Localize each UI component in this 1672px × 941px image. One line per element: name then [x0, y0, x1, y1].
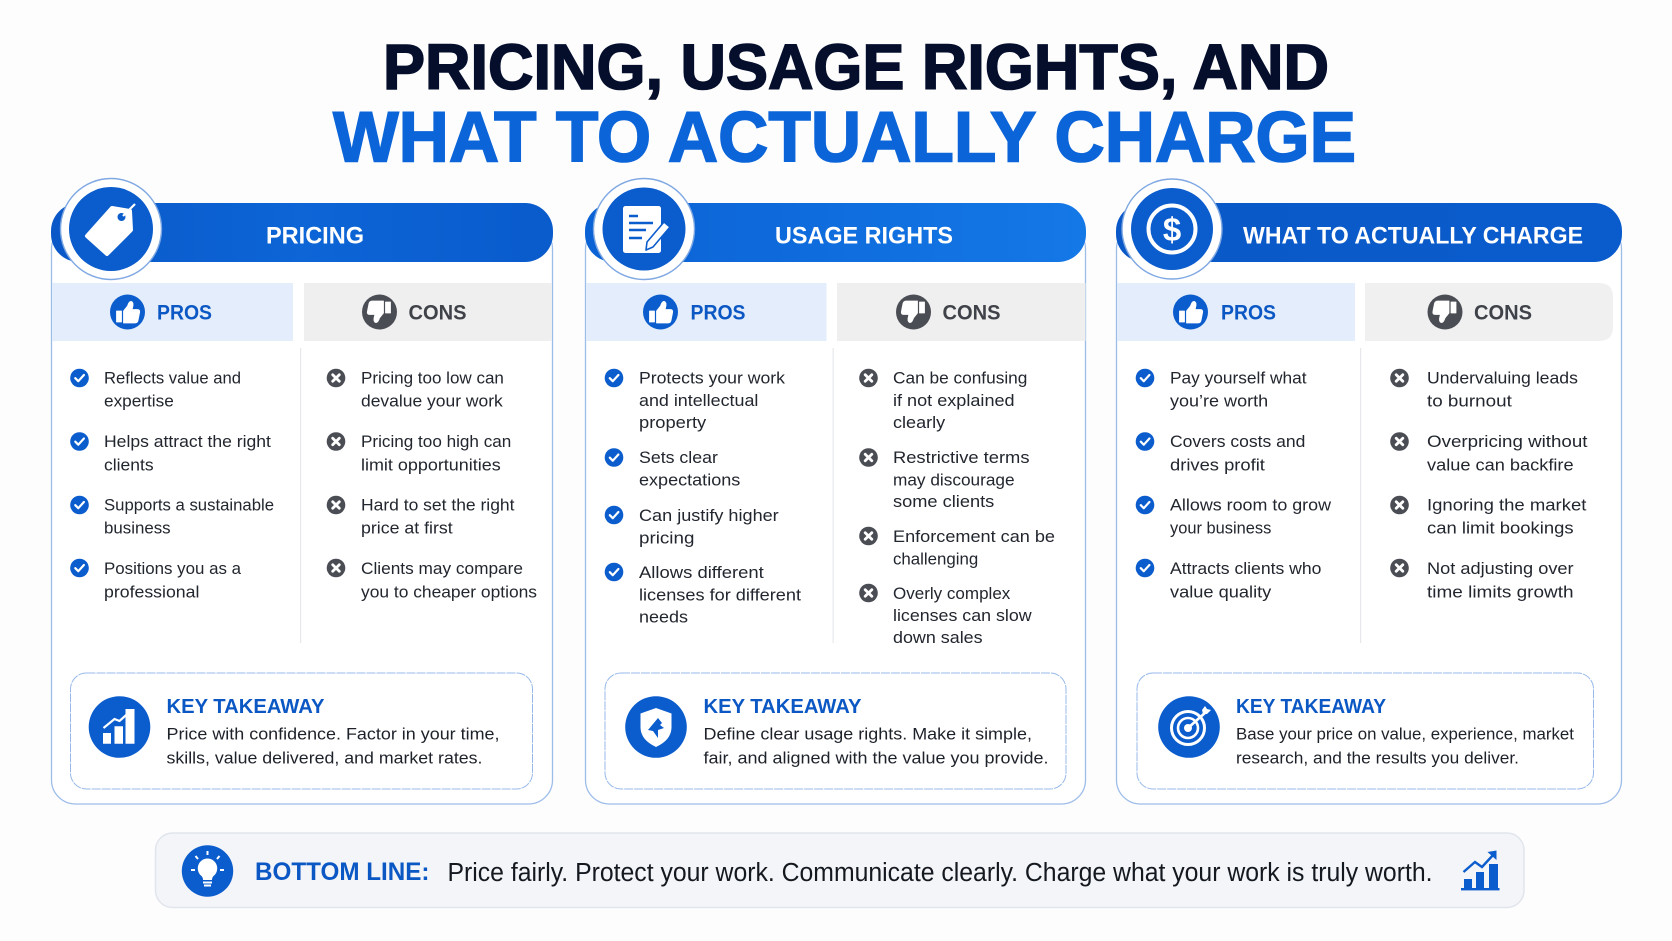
title	[333, 31, 1356, 178]
icon: rising chart	[1461, 850, 1500, 890]
pro item: drives profit	[1170, 456, 1265, 474]
pro item: Pay yourself what	[1170, 368, 1307, 388]
con item: challenging	[893, 550, 978, 568]
pro item	[70, 368, 241, 410]
pro item	[1136, 368, 1307, 410]
pro item: pricing	[639, 528, 694, 548]
title: WHAT TO ACTUALLY CHARGE	[333, 98, 1356, 178]
con item: Restrictive terms	[893, 448, 1030, 467]
pro item: you’re worth	[1170, 392, 1268, 410]
cons header: CONS	[408, 302, 466, 324]
pro item: Reflects value and	[104, 368, 241, 388]
pro item	[70, 496, 274, 538]
pros header: PROS	[690, 302, 746, 324]
pro item: clients	[104, 456, 154, 474]
icon: growth chart	[89, 696, 150, 758]
key takeaway	[605, 673, 1066, 789]
con item	[1390, 432, 1588, 474]
con item: you to cheaper options	[361, 582, 537, 602]
con item: some clients	[893, 492, 994, 511]
pro item: licenses for different	[639, 586, 801, 604]
con item	[327, 559, 537, 602]
header title: WHAT TO ACTUALLY CHARGE	[1243, 222, 1583, 250]
con item: limit opportunities	[361, 456, 501, 474]
con item: price at first	[361, 518, 453, 538]
pro item: expertise	[104, 392, 174, 410]
con item	[859, 448, 1030, 511]
con item: Not adjusting over	[1427, 559, 1574, 578]
con item	[859, 527, 1055, 568]
panel outline	[1116, 225, 1622, 804]
con item	[859, 368, 1027, 432]
icon: dollar coin: $	[1163, 211, 1181, 248]
con item: Overly complex	[893, 584, 1011, 603]
pros list	[1136, 368, 1332, 602]
pro item	[605, 506, 779, 548]
con item: if not explained	[893, 391, 1015, 410]
pro item: property	[639, 413, 707, 432]
pros header	[52, 283, 293, 341]
cons list	[1390, 368, 1588, 602]
cons header	[1365, 283, 1613, 341]
panel: what to actually charge	[1116, 179, 1622, 804]
con item: Can be confusing	[893, 368, 1027, 388]
con item: time limits growth	[1427, 582, 1574, 602]
header bar	[1116, 203, 1622, 262]
cons header: CONS	[1474, 302, 1532, 324]
bottom line banner: BOTTOM LINE:	[255, 858, 430, 886]
pro item: Covers costs and	[1170, 432, 1305, 451]
con item	[327, 368, 504, 410]
pro item	[70, 432, 271, 474]
pros header: PROS	[157, 302, 212, 324]
cons list	[859, 368, 1055, 647]
pro item: Positions you as a	[104, 559, 242, 578]
icon: document and pen	[594, 178, 694, 280]
pros header	[1117, 283, 1355, 341]
bottom line banner	[156, 833, 1524, 908]
con item: to burnout	[1427, 392, 1512, 410]
icon: price tag	[60, 178, 162, 280]
pro item: Helps attract the right	[104, 432, 271, 451]
pro item	[1136, 559, 1321, 602]
pro item: needs	[639, 608, 688, 626]
key takeaway: Base your price on value, experience, market	[1236, 724, 1574, 744]
cons header: CONS	[942, 302, 1000, 324]
con item: Enforcement can be	[893, 527, 1055, 546]
con item	[327, 432, 511, 474]
pro item	[605, 448, 740, 490]
key takeaway	[1137, 673, 1594, 789]
key takeaway: fair, and aligned with the value you provide.	[704, 748, 1048, 768]
pro item: Supports a sustainable	[104, 496, 274, 514]
icon: shield	[625, 696, 687, 758]
key takeaway	[70, 673, 532, 789]
pro item	[70, 559, 242, 602]
con item: down sales	[893, 628, 983, 647]
pro item: professional	[104, 582, 199, 602]
con item: may discourage	[893, 470, 1015, 490]
con item: Pricing too low can	[361, 368, 504, 388]
con item: value can backfire	[1427, 456, 1574, 474]
con item: Undervaluing leads	[1427, 368, 1578, 388]
key takeaway: KEY TAKEAWAY	[1236, 695, 1386, 718]
key takeaway: research, and the results you deliver.	[1236, 748, 1519, 768]
key takeaway: KEY TAKEAWAY	[704, 695, 862, 718]
pro item: Allows room to grow	[1170, 496, 1332, 514]
pro item: business	[104, 518, 171, 538]
header bar	[51, 203, 553, 262]
con item: devalue your work	[361, 392, 503, 410]
con item	[1390, 368, 1578, 410]
pros list	[70, 368, 274, 602]
pro item	[1136, 496, 1332, 538]
con item	[327, 496, 515, 538]
panel outline	[52, 225, 552, 804]
panel: usage rights	[585, 178, 1086, 804]
con item: Overpricing without	[1427, 432, 1588, 451]
header title: PRICING	[266, 222, 364, 250]
con item: Pricing too high can	[361, 432, 511, 451]
key takeaway: Price with confidence. Factor in your time,	[166, 724, 500, 744]
con item: clearly	[893, 413, 946, 432]
panel outline	[586, 225, 1086, 804]
icon: dollar coin	[1122, 179, 1222, 279]
key takeaway: Define clear usage rights. Make it simple,	[704, 724, 1032, 744]
header title: USAGE RIGHTS	[775, 222, 953, 250]
con item: can limit bookings	[1427, 518, 1574, 538]
pro item: Attracts clients who	[1170, 559, 1321, 578]
pro item: and intellectual	[639, 391, 758, 410]
con item: Clients may compare	[361, 559, 523, 578]
cons header	[837, 283, 1086, 341]
pros list	[605, 368, 801, 626]
pro item: Allows different	[639, 563, 764, 582]
header bar	[585, 203, 1086, 262]
pro item: expectations	[639, 470, 740, 490]
key takeaway: KEY TAKEAWAY	[166, 695, 325, 718]
pro item	[605, 368, 786, 432]
pro item: value quality	[1170, 582, 1272, 602]
con item: Hard to set the right	[361, 496, 515, 514]
cons list	[327, 368, 537, 602]
icon: light bulb	[182, 845, 233, 897]
pro item: Protects your work	[639, 368, 786, 388]
bottom line banner: Price fairly. Protect your work. Communicate clearly. Charge what your work is truly worth.	[448, 859, 1432, 887]
con item	[1390, 496, 1587, 538]
pros header: PROS	[1221, 302, 1276, 324]
icon: target	[1158, 696, 1220, 758]
con item	[859, 584, 1033, 647]
con item: Ignoring the market	[1427, 496, 1587, 514]
key takeaway: skills, value delivered, and market rates.	[166, 748, 482, 768]
pro item: Can justify higher	[639, 506, 779, 525]
cons header	[304, 283, 552, 341]
pros header	[586, 283, 826, 341]
con item: licenses can slow	[893, 606, 1033, 625]
title: PRICING, USAGE RIGHTS, AND	[383, 31, 1329, 103]
pro item	[605, 563, 801, 626]
pro item: Sets clear	[639, 448, 718, 467]
con item	[1390, 559, 1574, 602]
pro item	[1136, 432, 1305, 474]
pro item: your business	[1170, 518, 1271, 538]
panel: pricing	[51, 178, 553, 804]
